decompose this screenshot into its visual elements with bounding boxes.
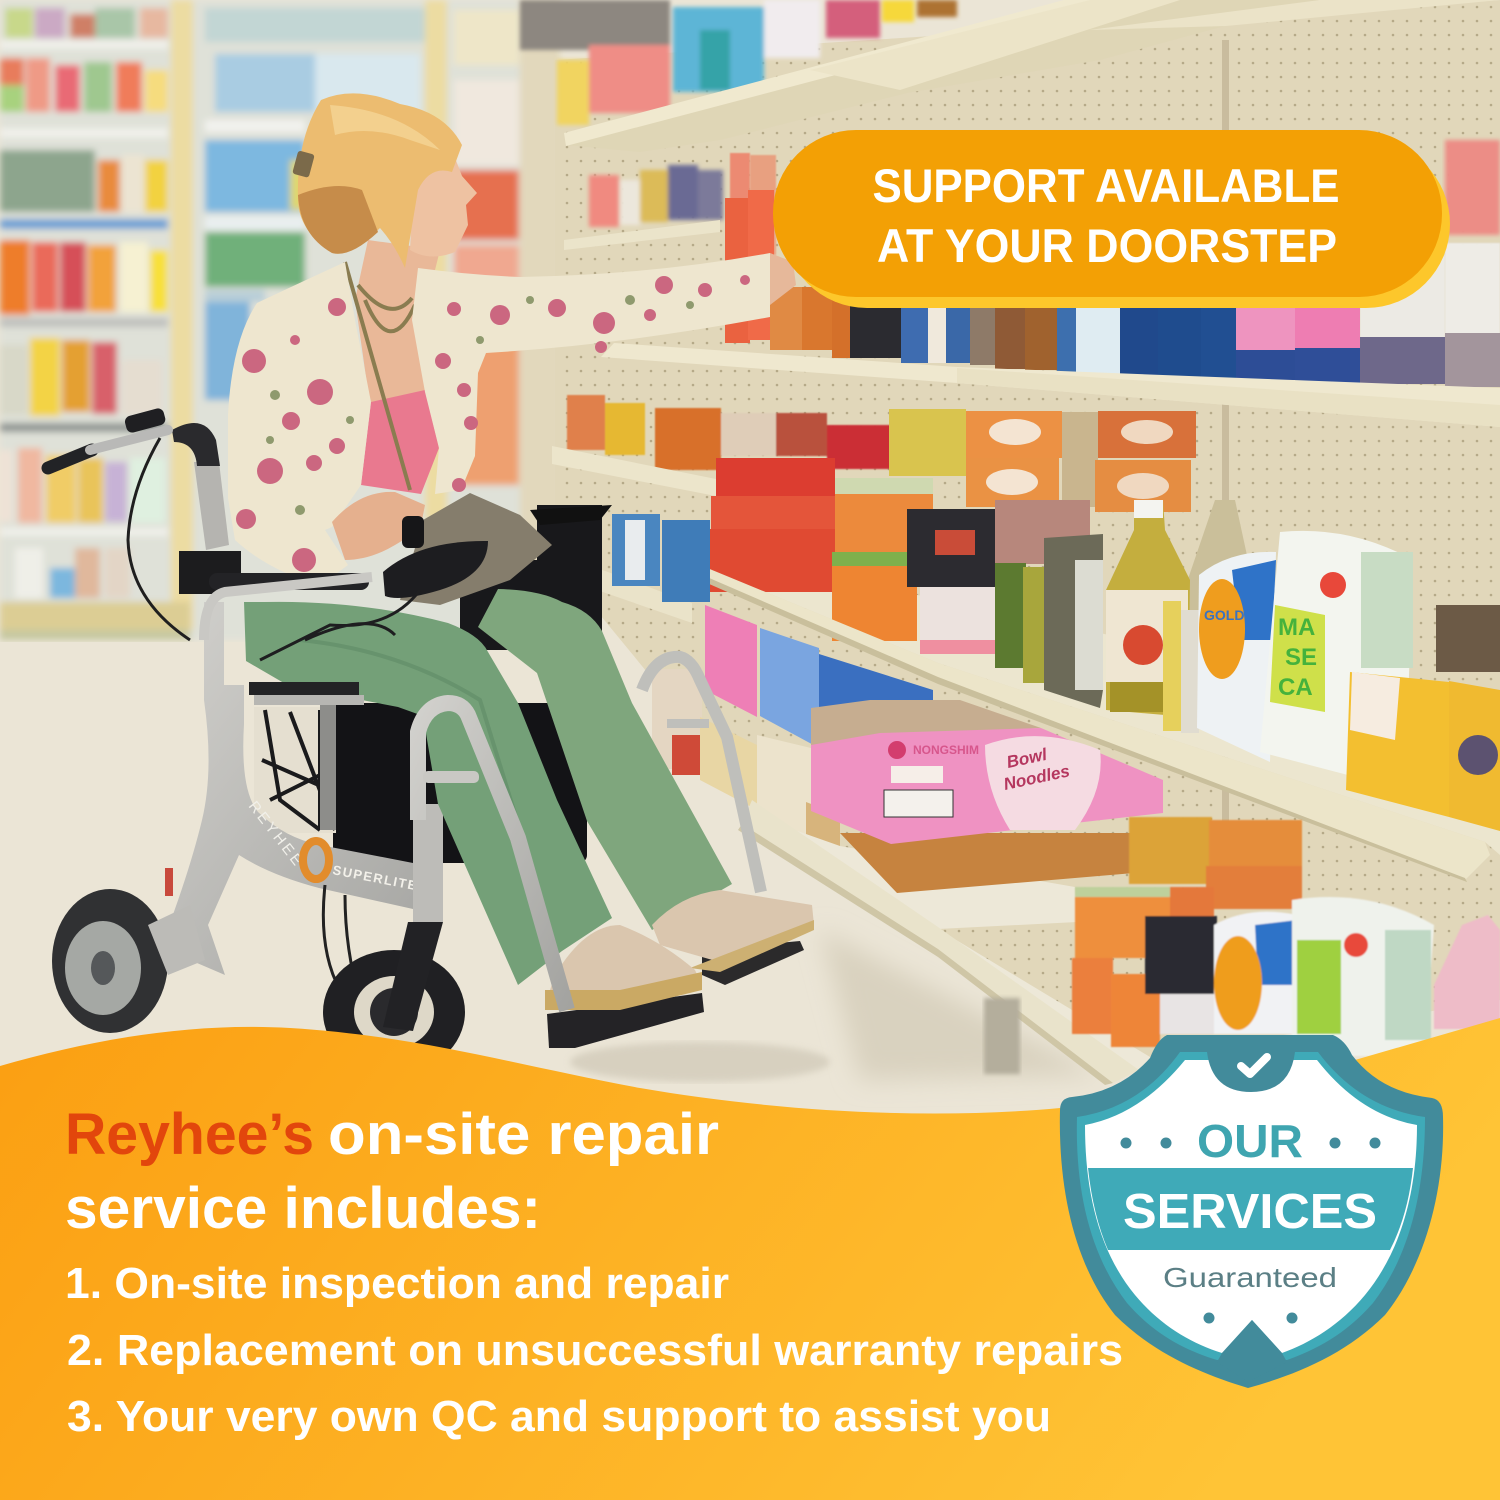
brown box <box>840 833 1134 893</box>
flour bag <box>1197 552 1276 762</box>
thigh and near leg <box>244 602 612 985</box>
woman shopping <box>204 93 814 1010</box>
shelf 3 front lip <box>700 565 1490 880</box>
callout: support available <box>773 130 1450 308</box>
joystick controller <box>383 541 488 598</box>
dots <box>1120 1138 1380 1324</box>
bowls and jars <box>889 409 966 476</box>
baking soda boxes <box>1346 672 1449 817</box>
far front tube <box>642 657 761 892</box>
foot plates <box>702 941 804 985</box>
wheelchair (front parts) <box>249 590 567 1010</box>
corn flour bag <box>1260 531 1413 790</box>
wheelchair (rear parts): REYHEE <box>245 798 307 871</box>
bottom notch <box>1217 1320 1287 1382</box>
floor <box>0 642 1000 1092</box>
check icon <box>1241 1057 1267 1074</box>
wheelchair (rear parts) <box>48 407 804 1074</box>
badge: our services guaranteed <box>1060 1035 1443 1388</box>
flowers <box>236 275 750 572</box>
lower products <box>1072 817 1500 1056</box>
hand reaching shelf <box>770 253 796 305</box>
heading: Reyhee’s <box>65 1102 314 1167</box>
bottom shelf <box>752 815 1155 1075</box>
front caster <box>323 950 465 1074</box>
bottom orange wave panel <box>0 1018 1500 1500</box>
far leg <box>478 589 732 930</box>
floor shadow near foot plate <box>570 1042 830 1082</box>
second shelf <box>601 343 1500 427</box>
shelves and groceries: SE <box>1285 644 1317 671</box>
silver frame arc <box>164 602 443 975</box>
upper right blurred products <box>1445 140 1500 235</box>
heading: service includes: <box>65 1176 541 1241</box>
shelf post <box>984 998 1020 1074</box>
shoes <box>652 890 814 965</box>
badge: our services guaranteed: OUR <box>1197 1115 1303 1167</box>
shield rim <box>1077 1052 1425 1360</box>
callout: support available: SUPPORT AVAILABLE <box>872 159 1340 212</box>
face <box>410 150 477 257</box>
wheelchair (rear parts): SUPERLITE <box>331 862 419 893</box>
shelves and groceries: Noodles <box>1002 761 1071 794</box>
service list: 1. On-site inspection and repair <box>65 1259 729 1308</box>
service list: 3. Your very own QC and support to assist you <box>67 1392 1051 1441</box>
callout: support available: AT YOUR DOORSTEP <box>877 219 1337 272</box>
neck and chest <box>355 240 440 405</box>
shelves and groceries: CA <box>1278 674 1313 701</box>
pegboard wall <box>555 0 1500 1060</box>
service list: 2. Replacement on unsuccessful warranty repairs <box>67 1326 1123 1375</box>
back tube and grips <box>194 462 229 550</box>
shelves and groceries: GOLD <box>1204 607 1244 623</box>
row under the callout <box>770 287 802 350</box>
top shelf <box>566 0 1320 152</box>
dark back item <box>1436 605 1500 672</box>
shelf 3 surface <box>697 555 1500 855</box>
blouse <box>228 262 371 585</box>
bag on lap <box>400 493 552 605</box>
heading: on-site repair <box>328 1102 719 1167</box>
shelves and groceries: NONGSHIM <box>913 743 979 757</box>
third row left <box>567 395 894 470</box>
second row left products <box>589 165 723 227</box>
armrest <box>209 573 369 590</box>
top notch <box>1207 1052 1295 1092</box>
heading <box>65 1102 719 1241</box>
pink top <box>361 390 439 494</box>
top products <box>520 0 957 125</box>
necklaces <box>345 262 415 490</box>
band <box>1088 1168 1413 1250</box>
badge: our services guaranteed: Guaranteed <box>1163 1262 1337 1293</box>
bowl noodles box <box>811 700 1041 750</box>
shelves and groceries: Bowl <box>1005 745 1050 772</box>
shelves and groceries <box>520 0 1500 1085</box>
cans <box>612 514 660 586</box>
rear wheel <box>52 889 168 1033</box>
blurred drink coolers at left <box>0 0 560 640</box>
badge: our services guaranteed: SERVICES <box>1123 1185 1377 1239</box>
shelves and groceries: MA <box>1278 614 1315 641</box>
shield outer <box>1060 1035 1443 1388</box>
boxes lower shelf <box>652 669 702 769</box>
hair <box>298 93 462 268</box>
service list <box>65 1259 1123 1441</box>
hand on joystick <box>332 492 425 560</box>
sauce bottles <box>730 153 750 253</box>
shield white field <box>1085 1060 1417 1353</box>
